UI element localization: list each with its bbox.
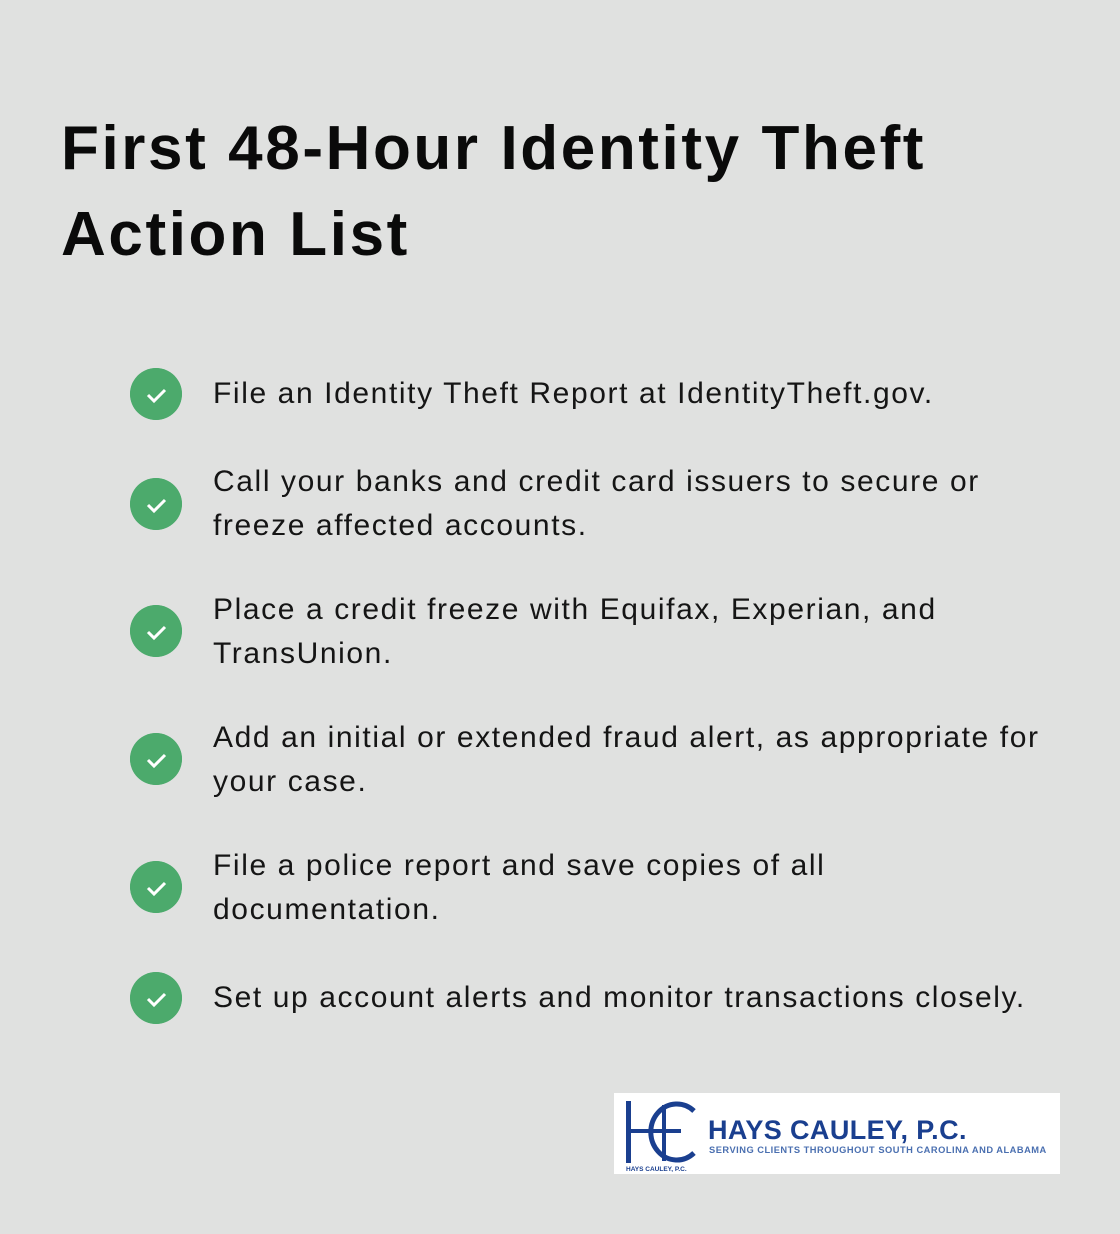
- logo: HAYS CAULEY, P.C.: [708, 1115, 967, 1145]
- title: Action List: [61, 200, 410, 269]
- logo: HAYS CAULEY, P.C.: [626, 1166, 687, 1173]
- logo: [614, 1093, 1060, 1174]
- item 4: your case.: [213, 765, 367, 798]
- title: [61, 114, 926, 269]
- item 3: [130, 593, 937, 670]
- item 6: Set up account alerts and monitor transactions closely.: [213, 981, 1026, 1014]
- item 1: [130, 368, 934, 420]
- item 2: freeze affected accounts.: [213, 509, 588, 542]
- item 6: [130, 972, 1026, 1024]
- item 5: [130, 849, 825, 926]
- item 4: [130, 721, 1040, 798]
- item 1: File an Identity Theft Report at IdentityTheft.gov.: [213, 377, 934, 410]
- item 2: [130, 465, 980, 542]
- item 4: Add an initial or extended fraud alert, as appropriate for: [213, 721, 1040, 754]
- item 3: TransUnion.: [213, 637, 393, 670]
- title: First 48-Hour Identity Theft: [61, 114, 926, 183]
- item 3: Place a credit freeze with Equifax, Experian, and: [213, 593, 937, 626]
- item 2: Call your banks and credit card issuers to secure or: [213, 465, 980, 498]
- logo: SERVING CLIENTS THROUGHOUT SOUTH CAROLINA AND ALABAMA: [709, 1145, 1047, 1155]
- item 5: File a police report and save copies of all: [213, 849, 825, 882]
- item 5: documentation.: [213, 893, 441, 926]
